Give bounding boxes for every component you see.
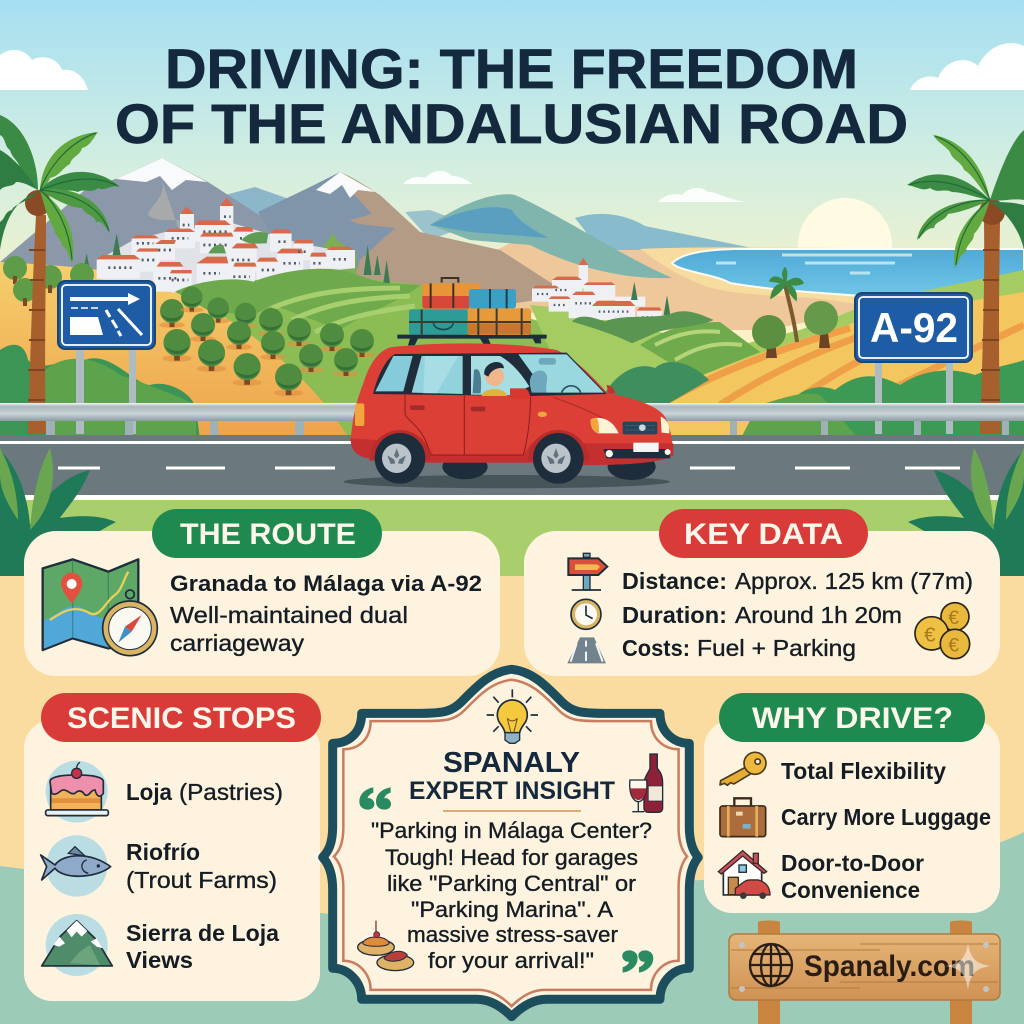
- text: duration: [622, 602, 902, 628]
- icon: mountains: [42, 914, 112, 976]
- text: quote body: Tough! Head for garages: [385, 845, 638, 870]
- icon: wine bottle and glass: [630, 754, 663, 812]
- text: quote body: massive stress-saver: [407, 922, 618, 947]
- icon: key: [720, 752, 766, 785]
- text: distance: [622, 568, 973, 594]
- doors: [405, 394, 531, 455]
- heading: why drive: WHY DRIVE?: [752, 702, 953, 735]
- text: carry more luggage: Carry More Luggage: [781, 804, 991, 830]
- panel: key data: [524, 509, 1000, 676]
- luggage: [409, 278, 531, 335]
- clouds: [0, 43, 1024, 202]
- heading: key data: KEY DATA: [684, 518, 843, 551]
- plants: left foliage: [0, 448, 116, 576]
- road sign: A-92: [855, 293, 972, 434]
- frame: [323, 669, 698, 1017]
- text: Sierra de Loja Views: [126, 920, 279, 973]
- text: door-to-door convenience: [781, 850, 924, 903]
- guardrail: [0, 403, 1024, 435]
- icon: suitcase: [720, 798, 766, 837]
- text: Sierra de Loja Views: Views: [126, 947, 193, 973]
- text: duration: Around 1h 20m: [735, 602, 902, 628]
- title: OF THE ANDALUSIAN ROAD: [115, 92, 908, 155]
- front lights and grille: [591, 418, 619, 433]
- icon: cake: [46, 761, 108, 823]
- scene: landscape with mountains, villages, sea and fields: [0, 0, 1024, 440]
- road sign: A-92: A-92: [870, 304, 958, 351]
- icon: euro coins: €: [948, 635, 959, 656]
- text: quote body: "Parking in Málaga Center?: [371, 818, 652, 843]
- icon: tapas: [358, 921, 414, 971]
- ground left: [0, 262, 420, 440]
- icon: map and compass: [43, 559, 157, 656]
- right hills: [530, 270, 1024, 440]
- icon: clock: [571, 599, 601, 629]
- panel: scenic stops: [24, 693, 321, 1001]
- text: Loja: Loja: [126, 779, 172, 805]
- text: distance: Approx. 125 km (77m): [735, 568, 973, 594]
- text: costs: [622, 635, 856, 661]
- text: duration: Duration:: [622, 602, 727, 628]
- icon: opening quote: [359, 787, 391, 810]
- text: door-to-door convenience: Convenience: [781, 877, 920, 903]
- far mountains: [0, 158, 762, 310]
- text: Riofrío: (Trout Farms): [126, 867, 277, 893]
- text: door-to-door convenience: Door-to-Door: [781, 850, 924, 876]
- text: Loja: (Pastries): [179, 779, 283, 805]
- green bushes along road: [0, 345, 1024, 440]
- title: [115, 37, 908, 155]
- heading: scenic stops: SCENIC STOPS: [67, 702, 296, 735]
- green slopes centre: [175, 276, 700, 440]
- heading: key data: [659, 509, 868, 558]
- icon: right palm tree: [907, 130, 1024, 434]
- icon: euro coins: €: [924, 623, 936, 646]
- road: [0, 435, 1024, 500]
- panel: the route: [24, 509, 500, 676]
- website signboard: [729, 920, 1000, 1024]
- text: website: Spanaly.com: [804, 950, 975, 983]
- road sign: arrow and junction: [58, 281, 155, 434]
- sand coast: [400, 238, 860, 330]
- icon: globe: [750, 944, 792, 986]
- icon: closing quote: [622, 950, 653, 973]
- wheels: [369, 430, 431, 461]
- icon: left palm tree: [0, 115, 120, 434]
- text: Sierra de Loja Views: Sierra de Loja: [126, 920, 279, 946]
- heading: the route: THE ROUTE: [180, 518, 356, 551]
- text: costs: Fuel + Parking: [697, 635, 856, 661]
- grass strip: [0, 500, 1024, 576]
- heading: why drive: [719, 693, 985, 742]
- text: route details: carriageway: [170, 630, 305, 656]
- sun: [798, 198, 892, 292]
- small palm and roadside trees right: [752, 268, 838, 358]
- text: Riofrío: [126, 839, 277, 893]
- text: route details: Well-maintained dual: [170, 602, 408, 628]
- panel: why drive: [704, 693, 1000, 913]
- heading: Spanaly expert insight: [409, 747, 615, 805]
- text: quote body: for your arrival!": [428, 948, 594, 973]
- icon: signpost: [568, 553, 607, 590]
- beach and sea: [640, 247, 1024, 305]
- car: red minivan with luggage and driver: [343, 278, 673, 488]
- text: quote body: [371, 818, 652, 973]
- text: total flexibility: Total Flexibility: [781, 758, 946, 784]
- title: DRIVING: THE FREEDOM: [165, 37, 858, 100]
- plants: right foliage: [908, 448, 1024, 576]
- olive orchard: [3, 256, 375, 396]
- text: costs: Costs:: [622, 635, 690, 661]
- text: quote body: "Parking Marina". A: [411, 897, 613, 922]
- heading: the route: [152, 509, 382, 558]
- text: distance: Distance:: [622, 568, 727, 594]
- heading: Spanaly expert insight: SPANALY: [443, 747, 580, 779]
- right village: [532, 258, 714, 343]
- windows: [373, 353, 607, 396]
- icon: fish: [41, 835, 111, 897]
- text: route details: Granada to Málaga via A-92: [170, 571, 482, 596]
- panel: Spanaly expert insight callout: [323, 669, 698, 1017]
- driver: [473, 362, 507, 396]
- text: Riofrío: Riofrío: [126, 839, 200, 865]
- left village: [83, 198, 390, 313]
- heading: scenic stops: [41, 693, 321, 742]
- text: route details: [170, 571, 482, 656]
- icon: light bulb: [487, 689, 538, 743]
- text: quote body: like "Parking Central" or: [387, 871, 636, 896]
- icon: road: [567, 637, 606, 663]
- roof rack: [397, 335, 547, 345]
- text: Loja: [126, 779, 283, 805]
- icon: euro coins: €: [948, 608, 959, 629]
- icon: house and car: [718, 851, 770, 899]
- icon: euro coins: [915, 603, 970, 659]
- heading: Spanaly expert insight: EXPERT INSIGHT: [409, 777, 615, 805]
- body: [351, 343, 673, 465]
